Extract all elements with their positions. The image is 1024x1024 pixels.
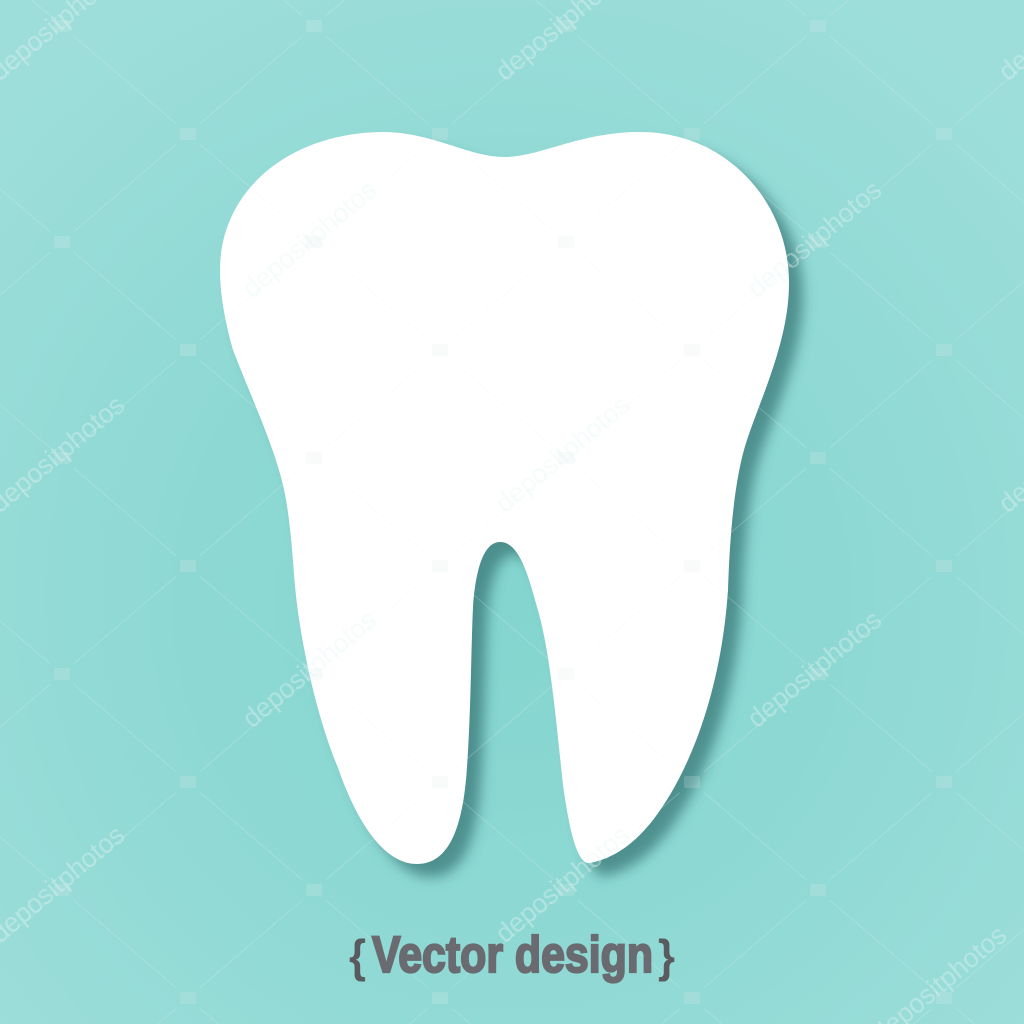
watermark text: depositphotos xyxy=(490,390,635,519)
caption: Vector design: Vector design xyxy=(372,926,653,983)
caption: Vector design: } xyxy=(658,930,675,982)
watermark text: depositphotos xyxy=(237,175,382,304)
tooth xyxy=(220,132,789,864)
caption: Vector design: { xyxy=(349,930,366,982)
tooth shadow xyxy=(234,145,803,877)
watermark text: depositphotos xyxy=(490,820,635,949)
watermark text: depositphotos xyxy=(237,605,382,734)
watermark text: depositphotos xyxy=(742,605,887,734)
watermark text: depositphotos xyxy=(742,175,887,304)
